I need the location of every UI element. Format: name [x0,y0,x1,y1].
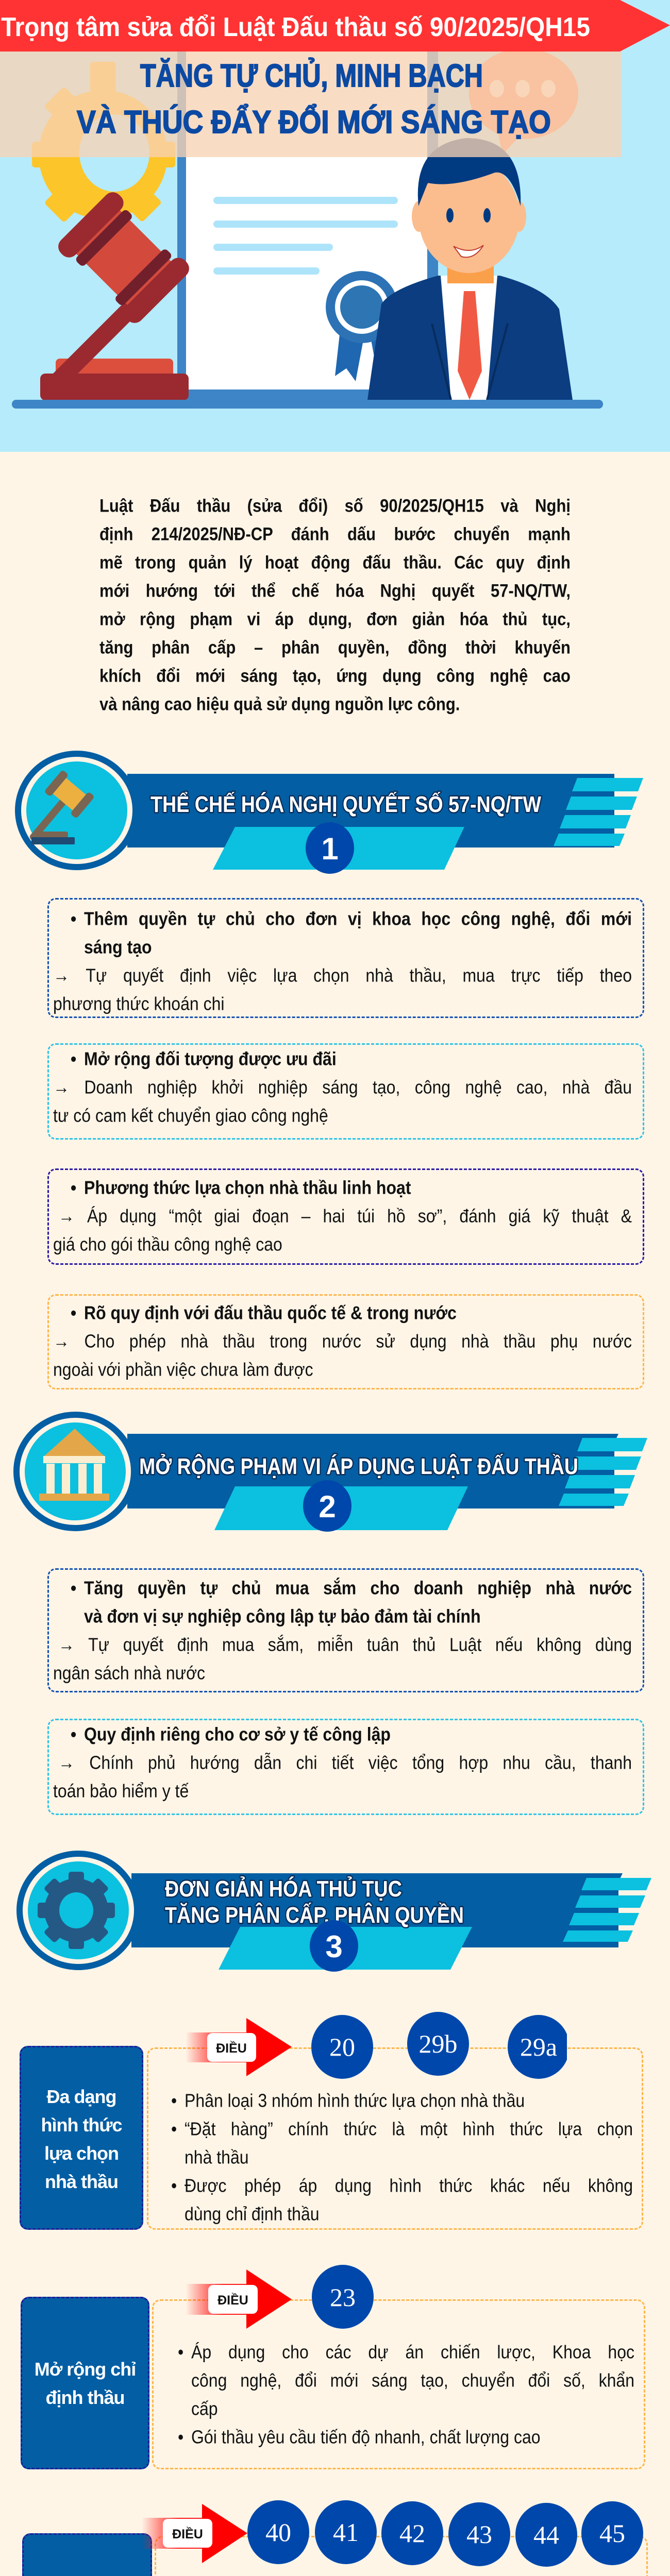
panel 2.1: Tăng quyền tự chủ mua sắm cho doanh nghiệp nhà nước [84,1577,632,1598]
section 3 header [16,1851,651,1972]
panel 1.4: → Cho phép nhà thầu trong nước sử dụng nhà thầu phụ nước [53,1330,632,1351]
panel 3.2 content box [152,2299,645,2469]
intro paragraph: và nâng cao hiệu quả sử dụng nguồn lực công. [99,694,460,714]
number badge 3: 3 [325,1929,343,1964]
intro paragraph: khích đổi mới sáng tạo, ứng dụng công nghệ cao [99,666,571,686]
panel 3.1 label: nhà thầu [45,2171,118,2192]
panel 3.2 content box: cấp [191,2398,218,2419]
number badge 3 [310,1920,358,1972]
panel 3.1 content box: dùng chỉ định thầu [185,2203,320,2224]
panel 2.1 [47,1568,644,1692]
panel 1.2 [47,1043,644,1140]
article arrow 3.3: ĐIỀU [172,2527,203,2541]
panel 1.2: Mở rộng đối tượng được ưu đãi [84,1048,337,1069]
section 2 header [13,1412,647,1532]
section 3 title: ĐƠN GIẢN HÓA THỦ TỤC [165,1875,402,1902]
top banner text: Trọng tâm sửa đổi Luật Đấu thầu số 90/2025/QH15 [1,12,590,42]
article arrow 3.1: 29a [520,2032,557,2061]
icon: gear [16,1851,140,1970]
section 2 title: MỞ RỘNG PHẠM VI ÁP DỤNG LUẬT ĐẤU THẦU [139,1453,578,1479]
panel 3.1 label: lựa chọn [44,2143,119,2164]
article arrow 3.2: ĐIỀU [217,2293,248,2308]
article arrow 3.1 [187,2012,567,2079]
icon: ribbon badge [326,271,398,381]
icon: gavel [38,189,193,401]
number badge 2 [303,1480,351,1532]
panel 3.1 content box: nhà thầu [185,2146,249,2167]
panel 2.2 [47,1719,644,1815]
panel 3.1 label [20,2046,143,2230]
panel 1.3: giá cho gói thầu công nghệ cao [53,1233,282,1255]
panel 3.1 label: Đa dạng [46,2086,116,2107]
panel 1.4: ngoài với phần việc chưa làm được [53,1359,313,1380]
intro paragraph: mở rộng phạm vi áp dụng, đơn giản hóa thủ tục, [99,609,571,629]
article arrow 3.1: ĐIỀU [216,2041,247,2056]
panel 1.4: Rõ quy định với đấu thầu quốc tế & trong nước [84,1302,457,1323]
panel 3.3 label [22,2533,152,2576]
panel 3.1 content box: Được phép áp dụng hình thức khác nếu không [185,2175,633,2196]
main title: TĂNG TỰ CHỦ, MINH BẠCH [140,58,483,94]
article arrow 3.3: 42 [399,2519,425,2548]
panel 3.1 content box [147,2047,643,2230]
section 1 header [15,751,643,874]
panel 1.1 [47,898,644,1018]
article arrow 3.1: 20 [329,2032,355,2061]
number badge 1 [306,822,354,874]
panel 2.2: toán bảo hiểm y tế [53,1780,189,1801]
icon: gear [32,62,175,247]
panel 3.2 label [21,2297,149,2469]
panel 1.1: → Tự quyết định việc lựa chọn nhà thầu, mua trực tiếp theo [53,964,632,986]
panel 3.2 label: Mở rộng chỉ [35,2359,136,2380]
icon: bank building [13,1412,137,1531]
intro paragraph: tăng phân cấp – phân quyền, đồng thời khuyến [99,637,571,657]
panel 1.2: tư có cam kết chuyển giao công nghệ [53,1105,328,1126]
panel 2.2: Quy định riêng cho cơ sở y tế công lập [84,1723,391,1744]
intro paragraph: mới hướng tới thể chế hóa Nghị quyết 57-NQ/TW, [99,581,571,601]
section 1 title: THỂ CHẾ HÓA NGHỊ QUYẾT SỐ 57-NQ/TW [150,791,541,817]
panel 1.1: sáng tạo [84,936,152,957]
panel 2.1: → Tự quyết định mua sắm, miễn tuân thủ Luật nếu không dùng [58,1634,632,1655]
panel 1.1: Thêm quyền tự chủ cho đơn vị khoa học công nghệ, đổi mới [84,908,632,929]
icon: gavel circle [15,751,139,870]
panel 1.2: → Doanh nghiệp khởi nghiệp sáng tạo, công nghệ cao, nhà đầu [53,1076,632,1097]
intro paragraph: Luật Đấu thầu (sửa đổi) số 90/2025/QH15 và Nghị [99,496,571,516]
article arrow 3.3: 43 [466,2520,492,2549]
panel 1.1: phương thức khoán chi [53,993,224,1014]
number badge 1: 1 [321,832,339,866]
panel 3.2 content box: Gói thầu yêu cầu tiến độ nhanh, chất lượng cao [191,2426,541,2447]
panel 2.2: → Chính phủ hướng dẫn chi tiết việc tổng hợp nhu cầu, thanh [58,1752,632,1773]
icon: businessman [367,138,573,400]
article arrow 3.1: 29b [418,2029,458,2058]
article arrow 3.3 [143,2500,643,2567]
hero: header illustration [0,0,670,452]
panel 3.2 content box: Áp dụng cho các dự án chiến lược, Khoa học [191,2341,634,2362]
panel 3.1 content box: Phân loại 3 nhóm hình thức lựa chọn nhà thầu [185,2090,525,2111]
article arrow 3.3: 41 [333,2518,359,2547]
icon: document [177,52,438,400]
panel 1.4 [47,1294,644,1389]
panel 1.3: Phương thức lựa chọn nhà thầu linh hoạt [84,1177,411,1198]
icon: speech bubble [469,48,578,155]
section 3 title [165,1875,464,1928]
intro paragraph: mẽ trong quản lý hoạt động đấu thầu. Các quy định [99,552,571,572]
red top banner [0,0,670,52]
article arrow 3.2: 23 [330,2283,356,2312]
panel 3.1 label: hình thức [41,2114,122,2136]
section 3 title: TĂNG PHÂN CẤP, PHÂN QUYỀN [165,1902,464,1928]
article arrow 3.3: 44 [533,2520,559,2549]
title band [0,52,621,157]
panel 3.1 content box: “Đặt hàng” chính thức là một hình thức lựa chọn [185,2118,633,2139]
panel 3.2 label: định thầu [46,2387,124,2408]
panel 1.3: → Áp dụng “một giai đoạn – hai túi hồ sơ”, đánh giá kỹ thuật & [58,1205,632,1226]
intro paragraph [99,496,571,714]
intro paragraph: định 214/2025/NĐ-CP đánh dấu bước chuyển mạnh [99,524,571,544]
panel 1.3 [47,1168,644,1265]
panel 2.1: và đơn vị sự nghiệp công lập tự bảo đảm tài chính [84,1605,481,1626]
main title: VÀ THÚC ĐẨY ĐỔI MỚI SÁNG TẠO [77,104,551,140]
panel 3.2 content box: công nghệ, đổi mới sáng tạo, chuyển đổi số, khẩn [191,2369,634,2391]
article arrow 3.3: 45 [599,2519,625,2548]
article arrow 3.2 [187,2265,374,2329]
main title [77,58,551,140]
panel 2.1: ngân sách nhà nước [53,1662,205,1683]
number badge 2: 2 [319,1489,336,1524]
article arrow 3.3: 40 [265,2518,291,2547]
panel 3.3 content box [155,2536,648,2576]
